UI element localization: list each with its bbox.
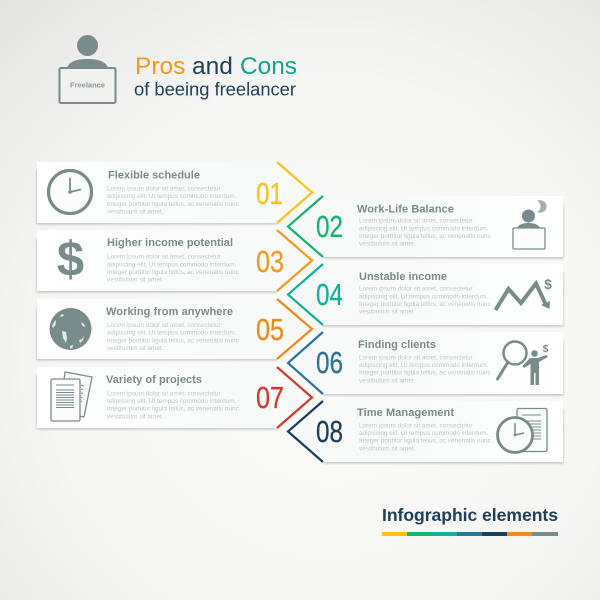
panel: 08 time management <box>287 401 564 464</box>
text block: vestibulum sit amet. <box>359 445 416 452</box>
icon: magnifier and person: $ <box>543 344 549 355</box>
chevron 07 <box>277 367 312 428</box>
icon: documents <box>51 372 92 421</box>
text block: adipiscing elit. Ut tempus commodo interdum. <box>359 293 489 300</box>
panel: 06 finding clients <box>287 332 564 396</box>
panel: 04 unstable income <box>287 264 564 326</box>
heading: Work-Life Balance <box>357 204 454 216</box>
text block: Integer porttitor ligula tellus, ac venenatis nunc <box>107 269 240 276</box>
heading: Unstable income <box>359 271 447 283</box>
text block: adipiscing elit. Ut tempus commodo interdum. <box>359 362 489 369</box>
number 08: 08 <box>316 414 343 449</box>
text block: Lorem ipsum dolor sit amet, consectetur <box>359 354 474 361</box>
chevron 06 <box>288 332 323 394</box>
heading: Variety of projects <box>106 374 202 386</box>
panel: 01 flexible schedule <box>36 162 313 224</box>
title: and <box>192 53 233 80</box>
number 04: 04 <box>316 277 343 312</box>
heading: Time Management <box>357 407 454 419</box>
heading: infographic elements: Infographic elements <box>382 505 558 525</box>
text block: Lorem ipsum dolor sit amet, consectetur <box>107 390 222 397</box>
text block: adipiscing elit. Ut tempus commodo interdum. <box>359 225 489 232</box>
number 05: 05 <box>256 312 284 347</box>
text block: Integer porttitor ligula tellus, ac venenatis nunc <box>359 438 492 445</box>
icon: freelancer at desk: Freelance <box>70 80 105 90</box>
chevron 05 <box>277 299 312 359</box>
panel: 05 working from anywhere <box>36 299 313 360</box>
text block: adipiscing elit. Ut tempus commodo interdum. <box>107 193 237 200</box>
number 07: 07 <box>256 380 284 415</box>
text block: vestibulum sit amet. <box>107 413 164 420</box>
heading: Finding clients <box>358 339 436 351</box>
title <box>134 53 297 100</box>
text block: Lorem ipsum dolor sit amet, consectetur <box>107 186 222 192</box>
text block: adipiscing elit. Ut tempus commodo interdum. <box>107 261 237 268</box>
title: Cons <box>240 53 297 80</box>
panel: 07 variety of projects <box>36 367 313 430</box>
colour bar <box>382 532 558 536</box>
text block: vestibulum sit amet. <box>359 241 416 248</box>
icon: clock <box>48 170 92 214</box>
chevron 01 <box>277 162 312 223</box>
text block: Lorem ipsum dolor sit amet, consectetur <box>107 254 222 261</box>
text block: Lorem ipsum dolor sit amet, consectetur <box>107 322 222 329</box>
chevron 02 <box>288 196 323 257</box>
chevron 04 <box>288 264 323 325</box>
icon: falling chart with dollar: $ <box>544 276 552 292</box>
text block: Lorem ipsum dolor sit amet, consectetur <box>359 286 474 293</box>
icon: person with moon <box>513 200 547 249</box>
text block: Integer porttitor ligula tellus, ac venenatis nunc <box>107 201 240 208</box>
number 02: 02 <box>316 209 343 244</box>
title: Pros <box>135 53 185 80</box>
icon: falling chart with dollar <box>496 276 552 310</box>
text block: vestibulum sit amet. <box>359 309 416 316</box>
panel: 02 work-life balance <box>287 196 564 258</box>
icon: freelancer at desk <box>60 35 116 103</box>
text block: vestibulum sit amet. <box>107 208 164 216</box>
text block: Integer porttitor ligula tellus, ac venenatis nunc <box>107 337 240 344</box>
icon: magnifier and person <box>498 342 549 385</box>
title: of beeing freelancer <box>134 78 296 100</box>
text block: adipiscing elit. Ut tempus commodo interdum. <box>107 330 237 337</box>
icon: globe <box>50 308 92 350</box>
panel: 03 higher income potential <box>36 230 313 292</box>
text block: adipiscing elit. Ut tempus commodo interdum. <box>107 398 237 405</box>
number 06: 06 <box>316 345 343 380</box>
chevron 03 <box>277 230 312 291</box>
text block: vestibulum sit amet. <box>107 345 164 352</box>
text block: Integer porttitor ligula tellus, ac venenatis nunc <box>359 233 492 240</box>
text block: Integer porttitor ligula tellus, ac venenatis nunc <box>359 301 492 308</box>
heading: Higher income potential <box>107 237 233 249</box>
text block: Lorem ipsum dolor sit amet, consectetur <box>359 422 474 429</box>
chevron 08 <box>288 401 323 462</box>
text block: vestibulum sit amet. <box>107 277 164 284</box>
heading: Flexible schedule <box>108 170 200 182</box>
icon: document and clock <box>498 408 547 452</box>
number 03: 03 <box>256 244 284 279</box>
text block: adipiscing elit. Ut tempus commodo interdum. <box>359 430 489 437</box>
text block: Lorem ipsum dolor sit amet, consectetur <box>359 218 474 225</box>
number 01: 01 <box>256 176 283 211</box>
icon: dollar: $ <box>57 233 84 287</box>
heading: Working from anywhere <box>106 306 233 318</box>
text block: Integer porttitor ligula tellus, ac venenatis nunc <box>359 370 492 377</box>
text block: vestibulum sit amet. <box>359 377 416 384</box>
text block: Integer porttitor ligula tellus, ac venenatis nunc <box>107 406 240 413</box>
